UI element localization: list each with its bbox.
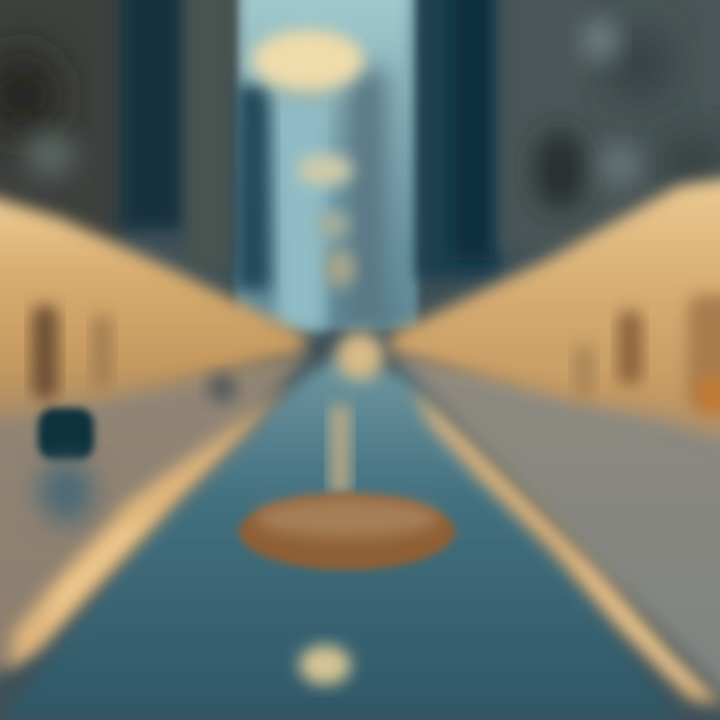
central vanishing point glow <box>336 332 384 380</box>
glowing right floor streak <box>410 385 720 705</box>
floor: right reflection <box>390 355 720 720</box>
floor: central blue walkway <box>0 355 680 720</box>
floor light spot <box>299 645 351 685</box>
round wooden platform <box>239 494 455 570</box>
glowing left floor streak <box>5 380 295 672</box>
wall: right glowing corridor <box>390 175 720 450</box>
distant small object <box>207 373 237 403</box>
dark object on left floor <box>38 408 94 524</box>
buildings: left <box>0 0 270 290</box>
reflected light column <box>330 405 350 495</box>
floor: left reflection <box>0 355 310 700</box>
sky and light shaft <box>236 0 418 330</box>
ceiling lamps <box>252 30 364 288</box>
buildings: right <box>416 0 720 280</box>
wall: left glowing corridor <box>0 190 305 425</box>
